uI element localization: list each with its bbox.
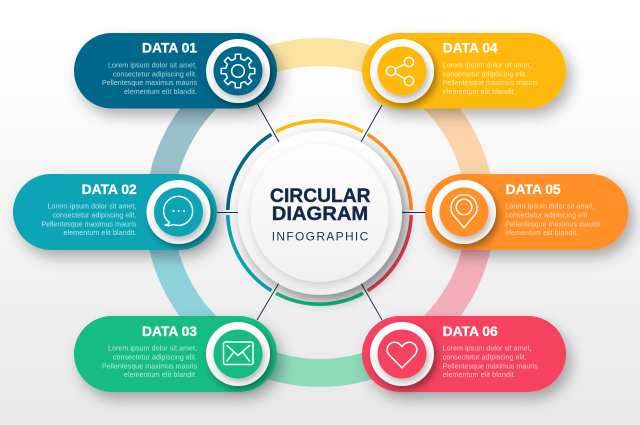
heading: data 04: DATA 04 bbox=[443, 41, 498, 56]
text block: data 01: consectetur adipiscing elit. bbox=[113, 71, 197, 78]
text block: data 05 bbox=[505, 204, 601, 237]
icon: location pin bbox=[432, 180, 496, 244]
text block: data 01 bbox=[102, 62, 198, 96]
panel: data 03 bbox=[74, 316, 277, 392]
text block: data 03: Pellentesque maximus mauris bbox=[102, 363, 198, 370]
text block: data 02: elementum elit blandit. bbox=[64, 230, 137, 237]
icon: heart bbox=[370, 322, 434, 386]
title: DIAGRAM bbox=[272, 203, 368, 225]
text block: data 03 bbox=[102, 346, 198, 379]
heading: data 01: DATA 01 bbox=[142, 41, 197, 56]
inner segmented ring bbox=[228, 121, 411, 304]
text block: data 01: Pellentesque maximus mauris bbox=[102, 80, 198, 87]
text block: data 02: consectetur adipiscing elit. bbox=[52, 212, 137, 220]
panel: data 04 bbox=[362, 33, 566, 108]
text block: data 04: Lorem ipsum dolor sit amet, bbox=[443, 62, 532, 70]
text block: data 01: Lorem ipsum dolor sit amet, bbox=[108, 62, 197, 70]
heading: data 03: DATA 03 bbox=[142, 324, 197, 339]
icon: envelope bbox=[206, 322, 270, 386]
title bbox=[270, 185, 371, 244]
icon: speech bubble bbox=[146, 180, 210, 244]
text block: data 02 bbox=[42, 204, 137, 237]
text block: data 04: elementum elit blandit. bbox=[443, 89, 516, 96]
text block: data 06: Lorem ipsum dolor sit amet, bbox=[443, 346, 532, 353]
text block: data 02: Lorem ipsum dolor sit amet, bbox=[48, 204, 137, 211]
text block: data 03: consectetur adipiscing elit. bbox=[113, 354, 197, 362]
text block: data 06: elementum elit blandit. bbox=[443, 372, 516, 379]
panel: data 02 bbox=[13, 174, 217, 250]
text block: data 05: elementum elit blandit. bbox=[505, 230, 578, 237]
text block: data 02: Pellentesque maximus mauris bbox=[42, 221, 137, 228]
panel: data 01 bbox=[74, 33, 277, 108]
panel: data 06 bbox=[362, 316, 566, 392]
text block: data 03: Lorem ipsum dolor sit amet, bbox=[108, 346, 197, 353]
large outer ring bbox=[160, 52, 480, 373]
heading: data 06: DATA 06 bbox=[443, 324, 498, 339]
text block: data 06: Pellentesque maximus mauris bbox=[443, 363, 538, 370]
text block: data 05: Pellentesque maximus mauris bbox=[505, 221, 601, 228]
connector lines bbox=[217, 103, 425, 320]
heading: data 02: DATA 02 bbox=[82, 182, 137, 197]
text block: data 05: consectetur adipiscing elit. bbox=[505, 212, 589, 220]
text block: data 04: Pellentesque maximus mauris bbox=[443, 80, 538, 87]
icon: gear bbox=[206, 39, 270, 103]
text block: data 06: consectetur adipiscing elit. bbox=[443, 354, 527, 362]
icon: share bbox=[370, 39, 434, 103]
heading: data 05: DATA 05 bbox=[506, 182, 561, 197]
text block: data 04: consectetur adipiscing elit. bbox=[443, 71, 527, 78]
title: INFOGRAPHIC bbox=[272, 230, 369, 244]
text block: data 03: elementum elit blandit. bbox=[124, 372, 197, 379]
panel: data 05 bbox=[425, 174, 628, 250]
text block: data 05: Lorem ipsum dolor sit amet, bbox=[505, 204, 594, 211]
text block: data 04 bbox=[443, 62, 538, 96]
text block: data 01: elementum elit blandit. bbox=[124, 89, 197, 96]
title: CIRCULAR bbox=[270, 185, 371, 207]
central disc bbox=[238, 131, 402, 295]
text block: data 06 bbox=[443, 346, 538, 379]
